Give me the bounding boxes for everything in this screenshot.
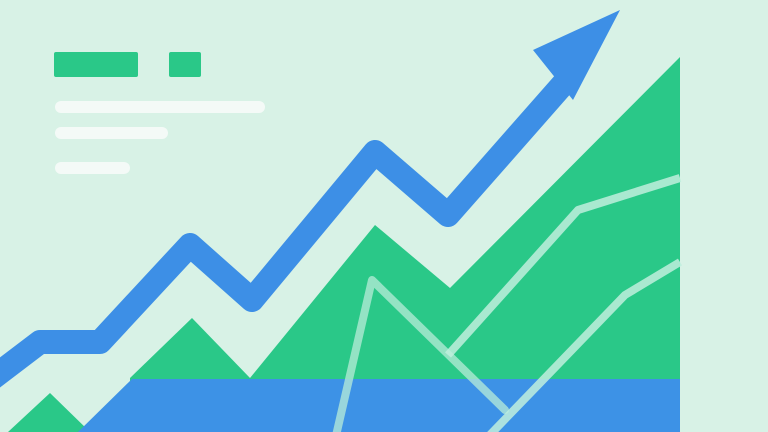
- blue band: [78, 379, 680, 432]
- green area: main mountains: [130, 57, 680, 432]
- legend bars: [54, 52, 201, 77]
- light trend line 3: [485, 262, 680, 432]
- light trend line 2: [448, 178, 680, 355]
- green area: small hill: [8, 393, 90, 432]
- blue arrow line: [0, 10, 620, 380]
- placeholder text lines: [55, 101, 265, 174]
- arrowhead: [533, 10, 620, 100]
- light trend line 1: [335, 280, 505, 432]
